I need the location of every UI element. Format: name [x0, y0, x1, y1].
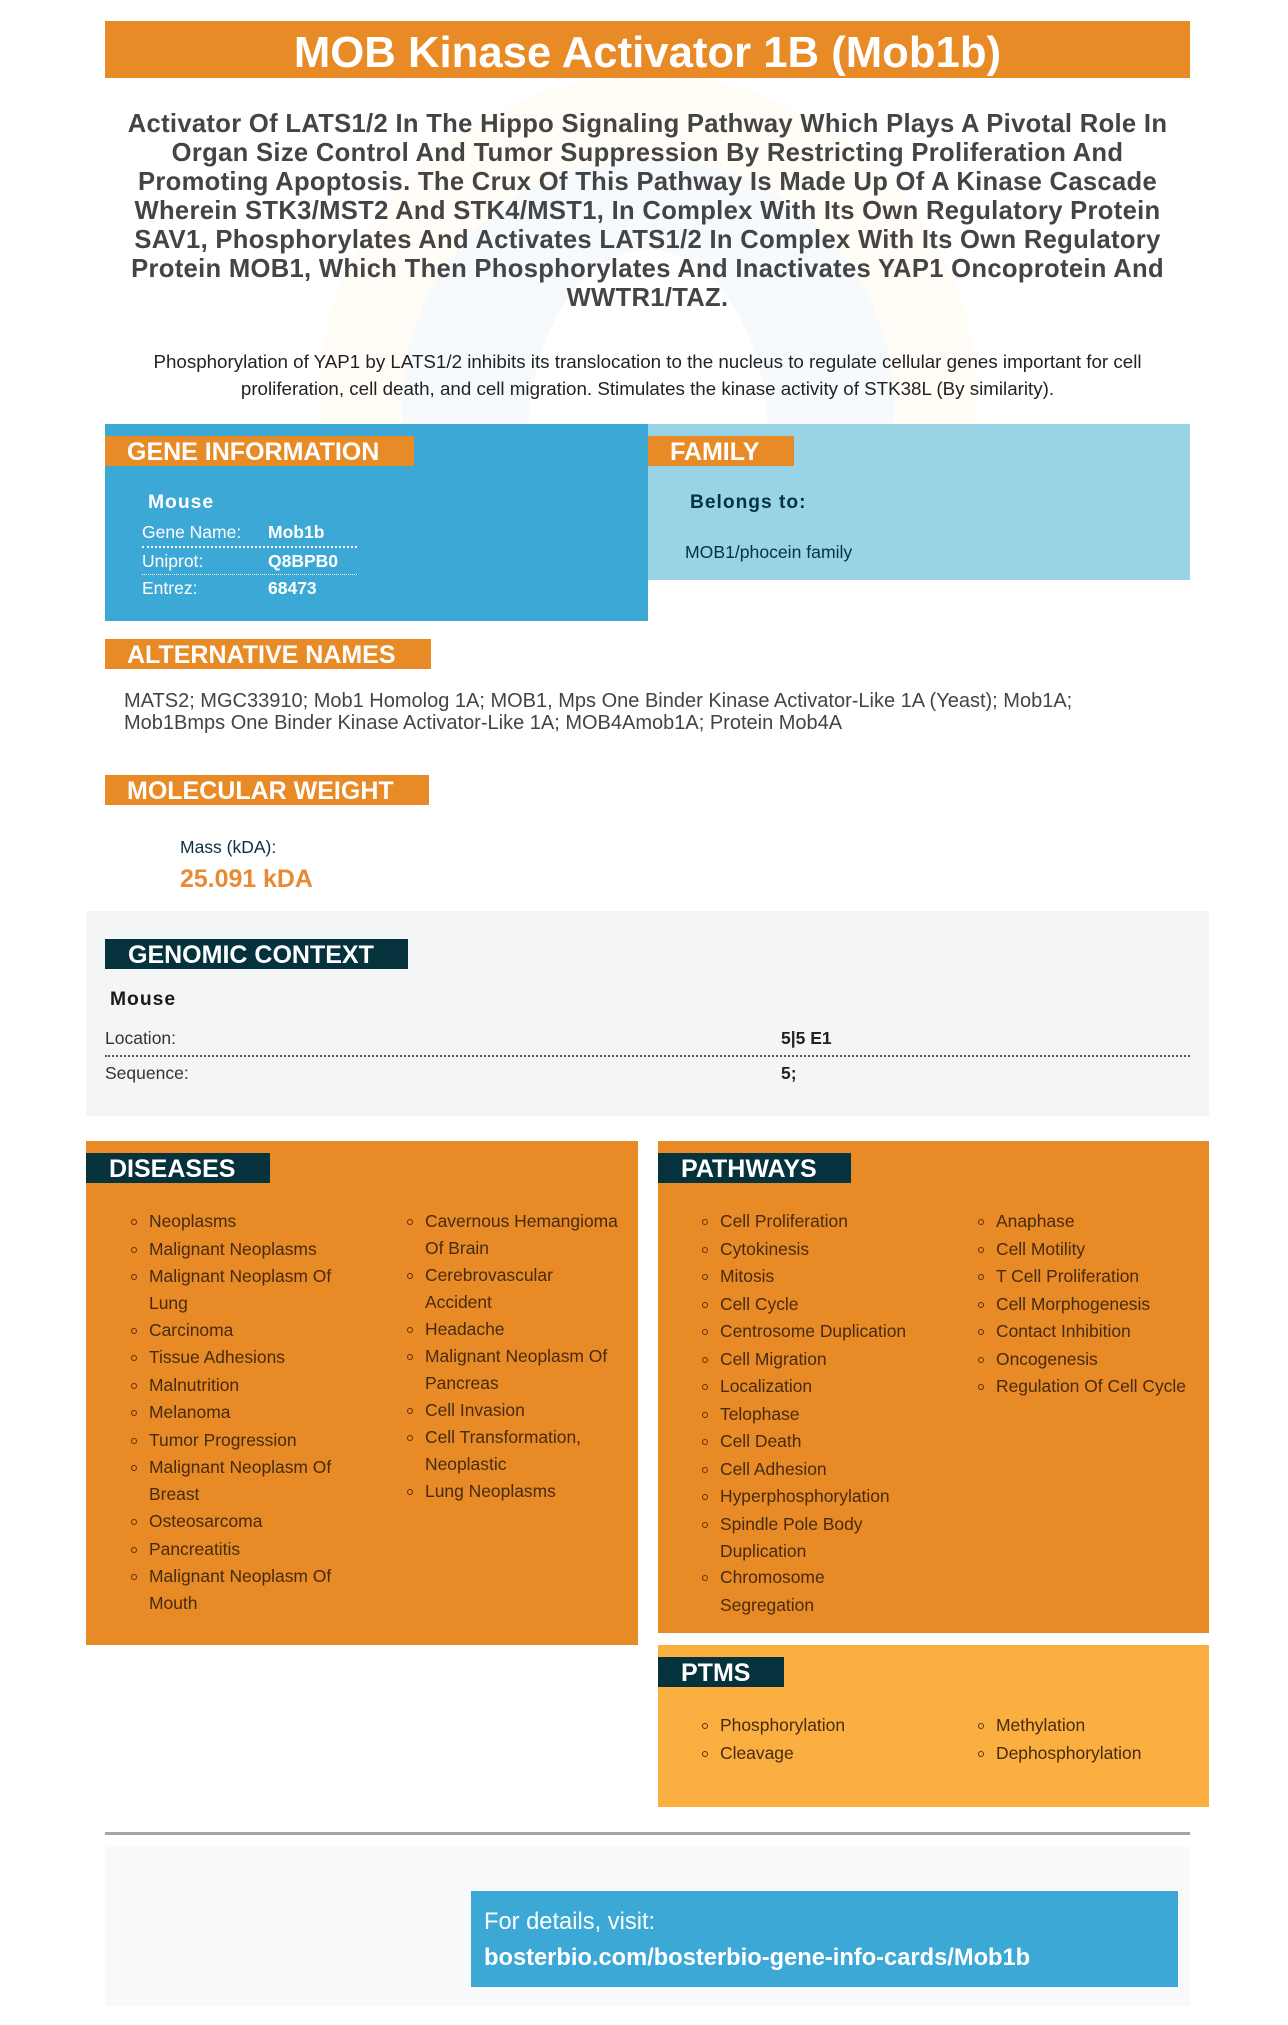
list: pathways column one: Cytokinesis — [720, 1239, 809, 1259]
location row: Location: — [105, 1028, 176, 1048]
species label: Mouse — [110, 989, 176, 1010]
list: pathways column one: Telophase — [720, 1404, 800, 1424]
list: pathways column one: Mitosis — [720, 1266, 774, 1286]
description text: proliferation, cell death, and cell migration. Stimulates the kinase activity of STK38L (By similarity). — [241, 378, 1054, 399]
sequence row — [105, 1063, 797, 1083]
alternative names text — [124, 690, 1072, 734]
family value: MOB1/phocein family — [685, 542, 852, 562]
heading: gene information: GENE INFORMATION — [127, 438, 379, 466]
molecular weight value — [180, 837, 313, 893]
panel: family — [648, 424, 1190, 580]
subtitle summary: SAV1, Phosphorylates And Activates LATS1/2 In Complex With Its Own Regulatory — [134, 226, 1161, 254]
list: diseases column two: Accident — [425, 1292, 492, 1312]
list: pathways column one: Spindle Pole Body — [720, 1514, 863, 1534]
list: diseases column one: Malignant Neoplasm Of — [149, 1457, 331, 1477]
list: pathways column two: T Cell Proliferation — [996, 1266, 1139, 1286]
panel: ptms — [658, 1645, 1209, 1807]
list: diseases column two: Headache — [425, 1319, 504, 1339]
list: diseases column one: Mouth — [149, 1593, 197, 1613]
list: pathways column two: Anaphase — [996, 1211, 1075, 1231]
list: pathways column one: Cell Cycle — [720, 1294, 798, 1314]
list: pathways column one: Duplication — [720, 1541, 806, 1561]
list: pathways column one: Cell Proliferation — [720, 1211, 848, 1231]
gene data table — [142, 522, 357, 598]
gene data table: Q8BPB0 — [268, 551, 338, 571]
panel: diseases — [86, 1141, 638, 1645]
list: diseases column two: Cerebrovascular — [425, 1265, 553, 1285]
list: diseases column one: Malignant Neoplasm Of — [149, 1566, 331, 1586]
heading: pathways — [658, 1153, 851, 1183]
sequence row: Sequence: — [105, 1063, 189, 1083]
heading: pathways: PATHWAYS — [681, 1155, 817, 1183]
list: ptms column two: Dephosphorylation — [996, 1743, 1141, 1763]
list: ptms column two — [978, 1715, 1141, 1763]
heading: ptms: PTMS — [681, 1659, 750, 1687]
subtitle summary — [128, 110, 1167, 312]
list: diseases column two: Lung Neoplasms — [425, 1481, 556, 1501]
list: ptms column one — [702, 1715, 845, 1763]
list: diseases column one: Osteosarcoma — [149, 1511, 262, 1531]
list: pathways column one — [702, 1211, 906, 1615]
list: diseases column one: Melanoma — [149, 1402, 230, 1422]
description text: Phosphorylation of YAP1 by LATS1/2 inhibits its translocation to the nucleus to regulate cellular genes important for cell — [153, 351, 1142, 372]
list: pathways column two — [978, 1211, 1186, 1396]
species label: Mouse — [148, 492, 214, 513]
panel: gene information — [105, 424, 648, 621]
title banner: MOB Kinase Activator 1B (Mob1b) — [294, 28, 1001, 77]
list: pathways column one: Cell Death — [720, 1431, 801, 1451]
heading: genomic context: GENOMIC CONTEXT — [128, 941, 374, 969]
list: diseases column two: Of Brain — [425, 1238, 489, 1258]
list: diseases column two: Cell Invasion — [425, 1400, 525, 1420]
list: diseases column two: Neoplastic — [425, 1454, 506, 1474]
list: ptms column one: Cleavage — [720, 1743, 794, 1763]
heading: family — [648, 436, 794, 466]
subtitle summary: Activator Of LATS1/2 In The Hippo Signaling Pathway Which Plays A Pivotal Role In — [128, 110, 1167, 138]
gene data table: 68473 — [268, 578, 317, 598]
list: diseases column one: Tissue Adhesions — [149, 1347, 285, 1367]
gene data table: Uniprot: — [142, 551, 203, 571]
list: diseases column two: Pancreas — [425, 1373, 499, 1393]
callout: details link: bosterbio.com/bosterbio-gene-info-cards/Mob1b — [484, 1945, 1030, 1971]
list: pathways column one: Segregation — [720, 1595, 814, 1615]
list: pathways column one: Hyperphosphorylation — [720, 1486, 890, 1506]
callout: details link: For details, visit: — [484, 1909, 655, 1935]
panel: footer — [105, 1847, 1190, 2006]
list: diseases column two — [407, 1211, 618, 1501]
list: pathways column one: Centrosome Duplication — [720, 1321, 906, 1341]
heading: molecular weight: MOLECULAR WEIGHT — [127, 777, 394, 805]
gene data table: Gene Name: — [142, 522, 241, 542]
list: ptms column two: Methylation — [996, 1715, 1085, 1735]
list: diseases column one — [131, 1211, 332, 1613]
list: ptms column one: Phosphorylation — [720, 1715, 845, 1735]
heading: family: FAMILY — [670, 438, 759, 466]
list: diseases column one: Tumor Progression — [149, 1430, 297, 1450]
list: diseases column two: Cavernous Hemangioma — [425, 1211, 618, 1231]
subtitle summary: Protein MOB1, Which Then Phosphorylates And Inactivates YAP1 Oncoprotein And — [131, 255, 1164, 283]
gene data table: Mob1b — [268, 522, 324, 542]
list: diseases column one: Neoplasms — [149, 1211, 236, 1231]
list: diseases column one: Carcinoma — [149, 1320, 233, 1340]
sequence row: 5; — [781, 1063, 797, 1083]
molecular weight value: 25.091 kDA — [180, 865, 313, 893]
belongs to label: Belongs to: — [690, 492, 807, 513]
subtitle summary: Wherein STK3/MST2 And STK4/MST1, In Complex With Its Own Regulatory Protein — [134, 197, 1160, 225]
list: diseases column one: Malignant Neoplasm Of — [149, 1266, 331, 1286]
location row: 5|5 E1 — [781, 1028, 832, 1048]
gene data table: Entrez: — [142, 578, 197, 598]
list: pathways column one: Cell Adhesion — [720, 1459, 827, 1479]
list: pathways column one: Localization — [720, 1376, 812, 1396]
description text — [153, 351, 1142, 399]
watermark logo — [318, 78, 978, 424]
list: diseases column one: Lung — [149, 1293, 188, 1313]
list: diseases column two: Cell Transformation, — [425, 1427, 581, 1447]
list: pathways column one: Cell Migration — [720, 1349, 827, 1369]
list: pathways column two: Regulation Of Cell Cycle — [996, 1376, 1186, 1396]
heading: diseases — [86, 1153, 270, 1183]
panel: pathways — [658, 1141, 1209, 1633]
list: pathways column one: Chromosome — [720, 1567, 825, 1587]
subtitle summary: Promoting Apoptosis. The Crux Of This Pathway Is Made Up Of A Kinase Cascade — [138, 168, 1157, 196]
list: pathways column two: Cell Motility — [996, 1239, 1085, 1259]
list: pathways column two: Contact Inhibition — [996, 1321, 1131, 1341]
heading: ptms — [658, 1657, 784, 1687]
list: diseases column one: Malnutrition — [149, 1375, 239, 1395]
list: pathways column two: Cell Morphogenesis — [996, 1294, 1150, 1314]
callout: details link — [471, 1891, 1178, 1987]
heading: alternative names: ALTERNATIVE NAMES — [127, 641, 396, 669]
list: diseases column one: Malignant Neoplasms — [149, 1239, 317, 1259]
list: diseases column one: Breast — [149, 1484, 199, 1504]
location row — [105, 1028, 832, 1048]
heading: diseases: DISEASES — [109, 1155, 235, 1183]
list: diseases column two: Malignant Neoplasm Of — [425, 1346, 607, 1366]
subtitle summary: Organ Size Control And Tumor Suppression By Restricting Proliferation And — [172, 139, 1123, 167]
alternative names text: MATS2; MGC33910; Mob1 Homolog 1A; MOB1, Mps One Binder Kinase Activator-Like 1A (Yeast); Mob1A; — [124, 690, 1072, 712]
panel: genomic context — [86, 911, 1209, 1116]
molecular weight value: Mass (kDA): — [180, 837, 276, 857]
alternative names text: Mob1Bmps One Binder Kinase Activator-Like 1A; MOB4Amob1A; Protein Mob4A — [124, 712, 842, 734]
subtitle summary: WWTR1/TAZ. — [567, 284, 728, 312]
list: diseases column one: Pancreatitis — [149, 1539, 240, 1559]
title banner — [105, 21, 1190, 78]
list: pathways column two: Oncogenesis — [996, 1349, 1098, 1369]
